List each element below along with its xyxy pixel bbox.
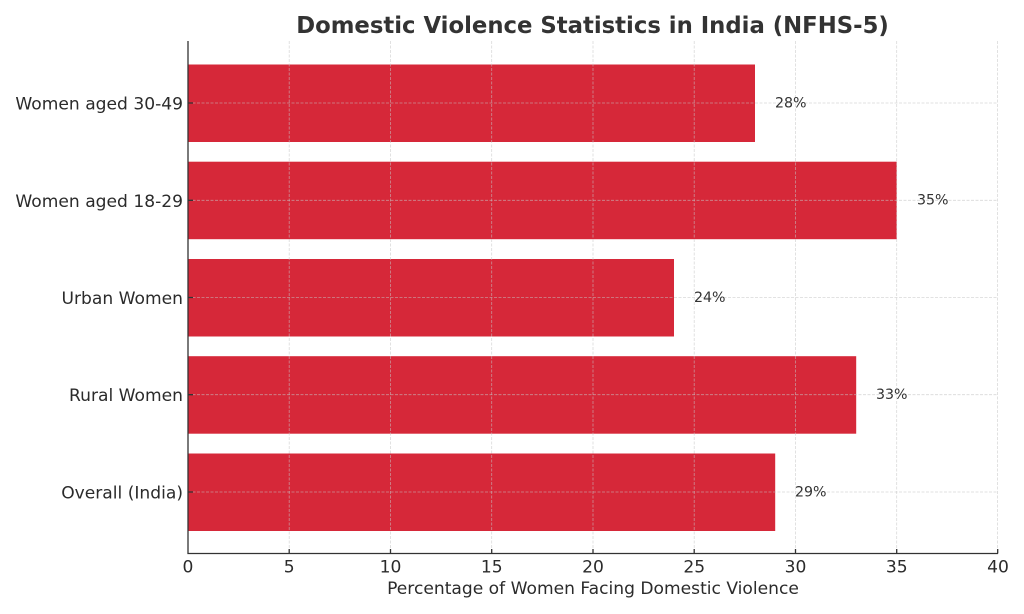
y-axis category labels: Rural Women	[69, 386, 183, 406]
value labels	[694, 95, 949, 500]
x-axis tick labels: 20	[582, 558, 604, 578]
axes	[188, 41, 998, 554]
title: Domestic Violence Statistics in India (NFHS-5)	[296, 13, 889, 39]
y-axis category labels: Women aged 30-49	[15, 94, 183, 114]
x-axis tick labels: 30	[785, 558, 806, 578]
value labels: 29%	[795, 484, 827, 500]
value labels: 28%	[775, 95, 807, 111]
x-axis tick labels: 25	[683, 558, 705, 578]
bars	[188, 64, 897, 531]
bar: Rural Women	[188, 356, 856, 434]
y-axis category labels: Urban Women	[62, 289, 183, 309]
x-axis title: Percentage of Women Facing Domestic Violence	[387, 579, 799, 599]
value labels: 33%	[876, 387, 908, 403]
x-axis tick labels: 10	[380, 558, 401, 578]
y-axis category labels: Overall (India)	[61, 484, 183, 504]
x-axis tick labels: 5	[284, 558, 295, 578]
x-axis tick labels: 40	[987, 558, 1009, 578]
bar: Overall (India)	[188, 454, 775, 531]
y-axis category labels	[15, 94, 183, 504]
value labels: 35%	[917, 193, 949, 209]
bar: Urban Women	[188, 259, 674, 336]
x-axis tick labels	[183, 558, 1009, 578]
value labels: 24%	[694, 290, 726, 306]
bar: Women aged 30-49	[188, 64, 755, 142]
x-axis tick labels: 35	[886, 558, 908, 578]
x-axis tick labels: 15	[481, 558, 503, 578]
x-axis tick labels: 0	[183, 558, 193, 578]
bar: Women aged 18-29	[188, 162, 897, 239]
y-axis category labels: Women aged 18-29	[15, 192, 183, 212]
